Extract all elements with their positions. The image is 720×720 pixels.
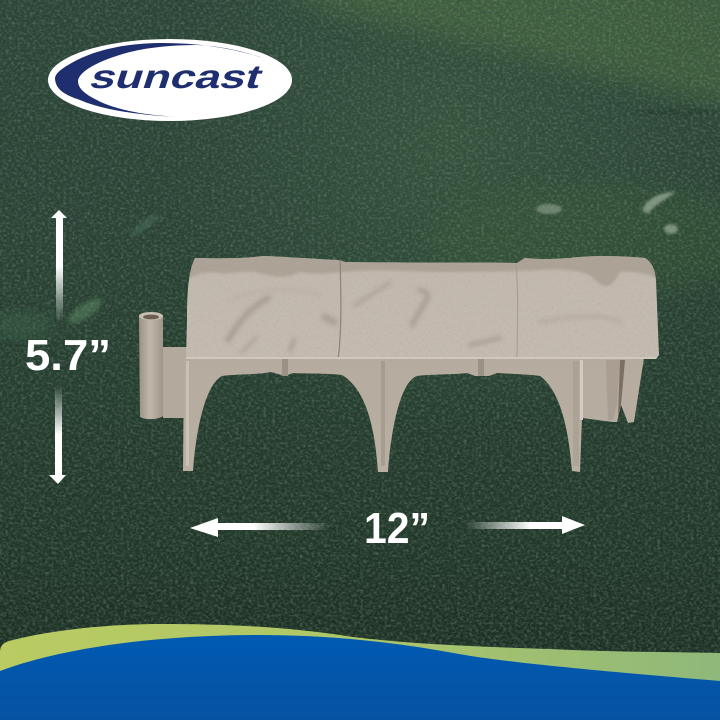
logo oval (48, 39, 292, 121)
rail and legs (183, 358, 644, 472)
green wave (0, 624, 720, 720)
logo wordmark: suncast (85, 59, 268, 96)
footer wave (0, 624, 720, 720)
logo: suncast (48, 39, 292, 121)
connector post (139, 312, 187, 419)
height arrow: bottom (49, 385, 66, 484)
stone face (186, 256, 659, 359)
width arrow: right (465, 516, 585, 534)
width arrow: left (190, 518, 330, 537)
height label: 5.7” (25, 331, 111, 380)
blue wave (0, 635, 720, 720)
width label: 12” (364, 504, 430, 553)
logo swoosh (55, 43, 263, 117)
stone top shaded band (189, 256, 656, 286)
product: stone garden edging (139, 250, 670, 472)
stone block seams (338, 260, 341, 360)
height arrow: top (51, 210, 67, 322)
